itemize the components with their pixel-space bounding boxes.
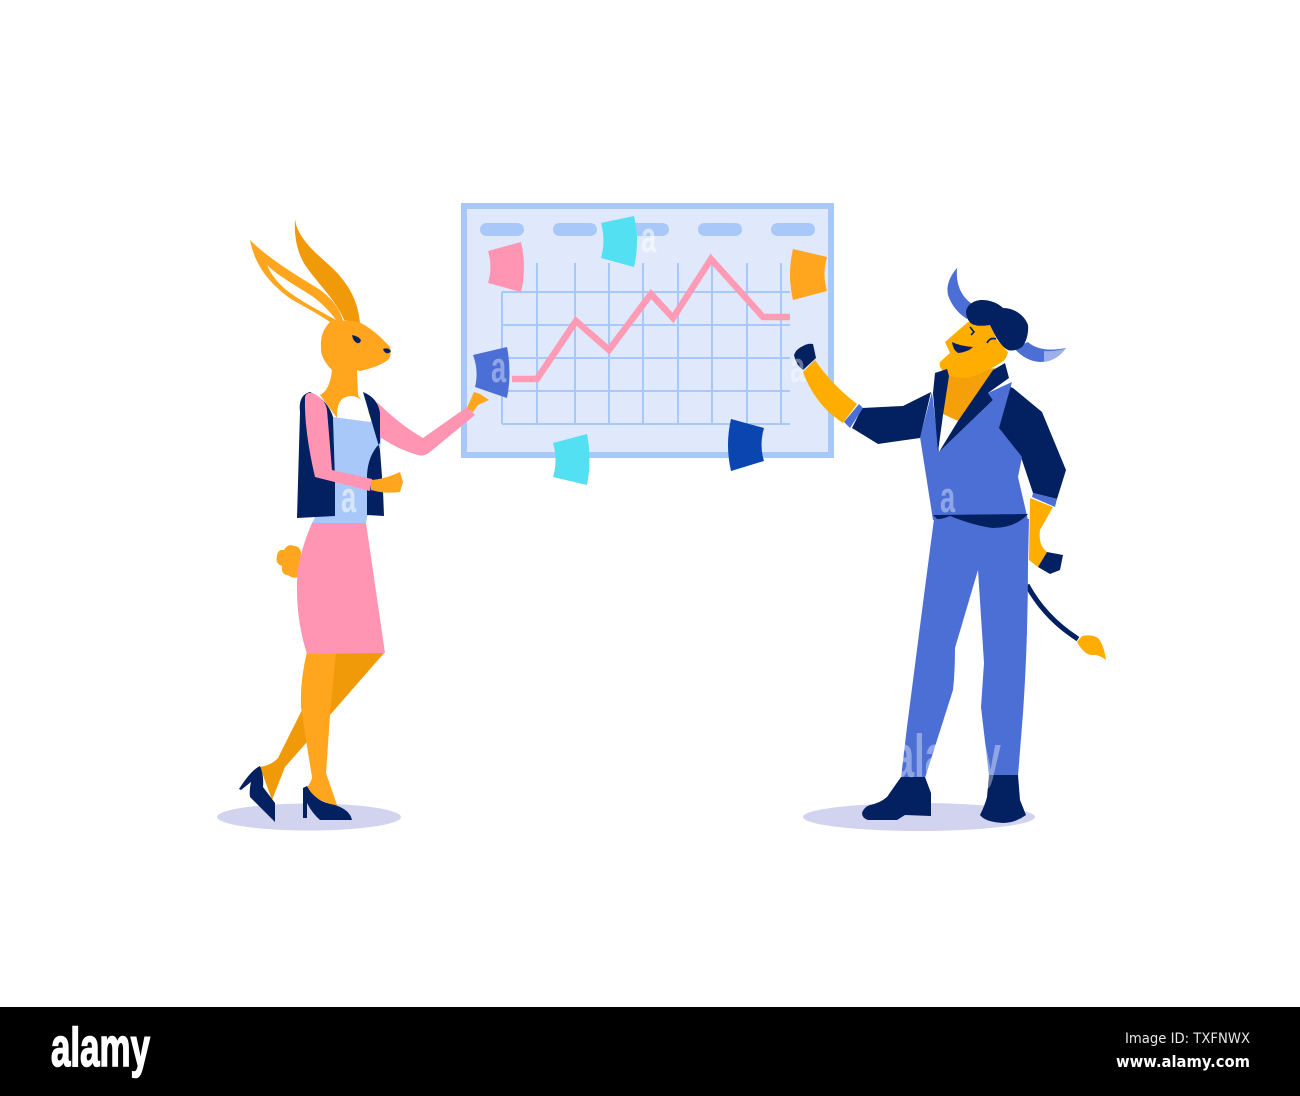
bull left boot <box>862 777 931 820</box>
rabbit neck and head <box>320 320 391 418</box>
bull horn highlight <box>1044 348 1066 362</box>
character: rabbit woman <box>239 219 489 822</box>
rabbit left shoe <box>239 766 275 822</box>
rabbit left arm <box>305 393 372 491</box>
watermark letters: a <box>341 472 357 522</box>
bull fist <box>794 344 816 370</box>
sticky note: cyan bottom <box>553 434 590 485</box>
bull mouth <box>952 342 973 353</box>
bull hip hand <box>1029 498 1053 567</box>
rabbit skirt <box>297 523 385 654</box>
bull forearm <box>803 360 857 423</box>
board frame <box>464 206 831 455</box>
watermark letters: a <box>491 342 507 392</box>
bull right horn <box>1014 342 1066 362</box>
rabbit eye <box>352 335 361 343</box>
bull lifted sleeve <box>852 392 931 444</box>
rabbit right arm <box>377 402 475 456</box>
bull lifted cuff <box>844 404 863 428</box>
character: bull man <box>794 268 1106 823</box>
sticky note: orange <box>790 249 827 300</box>
bull hip fist <box>1038 552 1063 574</box>
bull eye left <box>970 327 974 335</box>
footer bar <box>0 1007 1300 1096</box>
bull tail tuft <box>1077 635 1106 660</box>
bull eye right <box>987 338 996 343</box>
rabbit white collar <box>337 396 371 420</box>
bull hip cuff <box>1032 493 1057 507</box>
footer logo: alamy <box>51 1016 150 1078</box>
sticky note: pink <box>488 242 524 292</box>
bull hair <box>966 300 1028 351</box>
bull belt <box>933 514 1028 528</box>
rabbit right shoe <box>303 786 352 820</box>
shadow: rabbit <box>217 804 401 830</box>
bull neck <box>943 368 995 421</box>
chart grid <box>502 263 790 424</box>
panel: chart board <box>464 206 831 485</box>
rabbit nose <box>383 348 391 353</box>
rabbit left hand <box>371 472 403 493</box>
bull face <box>940 322 1008 378</box>
rabbit front leg <box>301 652 338 808</box>
watermark letters: a <box>641 212 657 262</box>
sticky note: dark blue <box>728 419 764 471</box>
rabbit front ear <box>250 240 343 322</box>
header pills <box>480 223 815 236</box>
rabbit right hand <box>467 392 489 412</box>
bull lapel right <box>939 363 1009 452</box>
bull tail <box>1027 585 1078 639</box>
line chart: trend <box>512 259 790 379</box>
rabbit vest left <box>297 392 335 518</box>
watermark letters: a <box>940 472 956 522</box>
rabbit top <box>312 417 382 523</box>
bull right boot <box>980 775 1026 823</box>
sticky note: blue <box>473 347 510 398</box>
rabbit back leg <box>260 652 385 800</box>
rabbit back ear <box>295 219 360 323</box>
bull trousers <box>901 519 1029 778</box>
shadow: bull <box>803 803 1035 831</box>
bull lapel left <box>933 369 949 452</box>
watermark letters: alamy <box>893 723 1001 790</box>
rabbit tail <box>277 545 301 578</box>
image id: Image ID: TXFNWX <box>1125 1031 1250 1047</box>
website: www.alamy.com <box>1116 1052 1250 1071</box>
watermark letters: a <box>790 342 806 392</box>
bull hip arm sleeve <box>995 385 1066 499</box>
bull left horn <box>947 268 972 319</box>
watermark letters <box>341 212 1001 790</box>
rabbit vest right <box>363 392 384 516</box>
bull jacket <box>920 382 1028 520</box>
sticky note: cyan top <box>601 216 637 267</box>
bull shirt <box>939 415 958 451</box>
